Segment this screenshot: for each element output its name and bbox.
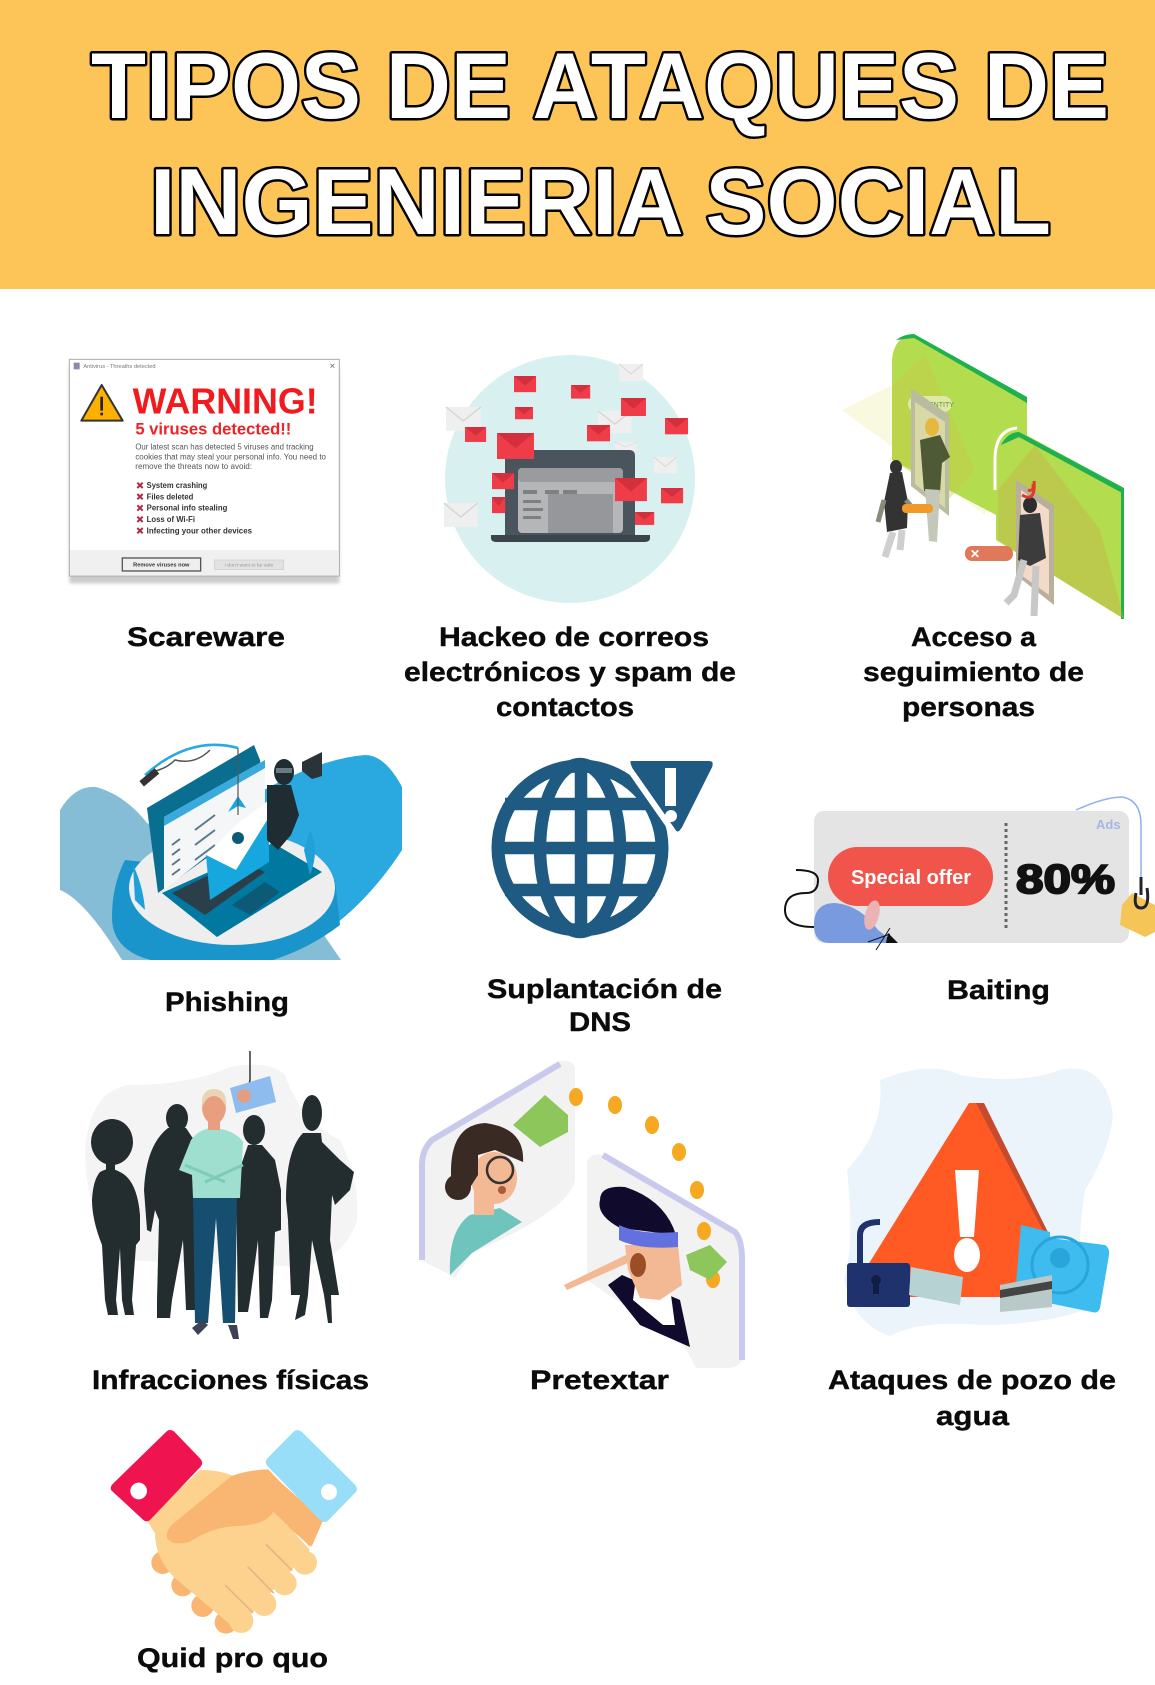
icon: warning window <box>69 359 339 583</box>
label: Ataques de pozo de agua <box>828 1365 1116 1431</box>
panel: pretexting <box>420 1061 744 1395</box>
label: Hackeo de correos: Hackeo de correos <box>439 622 709 652</box>
icon: handshake <box>111 1430 357 1634</box>
label: Acceso a seguimiento de personas: Acceso a <box>911 622 1037 652</box>
label: Scareware: Scareware <box>127 622 285 652</box>
icon: ad coupon with mouse and bait: 80% <box>1016 856 1115 902</box>
icon: warning window: Files deleted <box>147 492 193 501</box>
icon: warning window: WARNING! <box>133 380 318 421</box>
panel: tailgating <box>842 334 1124 722</box>
label: Acceso a seguimiento de personas: personas <box>902 692 1035 722</box>
label: Ataques de pozo de agua: Ataques de pozo de <box>828 1365 1116 1395</box>
icon: laptop with spam envelopes <box>444 355 695 603</box>
icon: warning window: Personal info stealing <box>147 504 227 513</box>
icon: video call with impostor <box>420 1061 744 1368</box>
icon: warning window: Remove viruses now <box>133 563 190 569</box>
title banner <box>0 0 1155 289</box>
icon: security doors with tailgaters: IDENTITY <box>922 402 954 409</box>
label: Hackeo de correos <box>404 622 736 722</box>
panel: DNS spoofing <box>487 758 722 1037</box>
icon: warning triangle with lock and folder <box>844 1068 1113 1336</box>
icon: laptop phishing hook <box>60 745 402 960</box>
icon: warning window: Our latest scan has detected 5 viruses and tracking <box>135 443 314 452</box>
icon: warning window: ✕ <box>329 362 335 371</box>
icon: warning window: Infecting your other devices <box>147 526 253 535</box>
label: Phishing: Phishing <box>165 987 289 1017</box>
icon: warning window: Loss of Wi-Fi <box>147 515 195 524</box>
label: Suplantación de DNS <box>487 974 722 1037</box>
label: Quid pro quo: Quid pro quo <box>137 1643 328 1673</box>
panel: physical breaches <box>85 1051 369 1395</box>
panel: baiting <box>785 797 1155 1005</box>
icon: warning window: 5 viruses detected!! <box>135 420 291 439</box>
panel: scareware <box>69 359 339 652</box>
label: Acceso a seguimiento de personas: seguimiento de <box>863 657 1084 687</box>
label: Hackeo de correos: contactos <box>496 692 634 722</box>
title: TIPOS DE ATAQUES DE <box>91 33 1109 138</box>
label: Baiting: Baiting <box>947 975 1050 1005</box>
label: Ataques de pozo de agua: agua <box>936 1401 1010 1431</box>
label: Infracciones físicas: Infracciones físicas <box>92 1365 369 1395</box>
icon: group of silhouettes and employee <box>85 1051 357 1339</box>
icon: security doors with tailgaters <box>842 334 1124 619</box>
panel: phishing <box>60 745 402 1017</box>
panel: quid pro quo <box>111 1430 357 1673</box>
title <box>91 33 1109 254</box>
icon: warning window: System crashing <box>147 481 207 490</box>
label: Hackeo de correos: electrónicos y spam de <box>404 657 736 687</box>
icon: warning window: Antivirus - Threaths detected <box>83 364 156 370</box>
label: Suplantación de DNS: DNS <box>569 1007 631 1037</box>
label: Acceso a seguimiento de personas <box>863 622 1084 722</box>
icon: ad coupon with mouse and bait: Ads <box>1096 817 1121 832</box>
icon: ad coupon with mouse and bait: Special offer <box>851 867 971 889</box>
panel: email hacking <box>404 355 736 722</box>
icon: warning window: remove the threats now to avoid: <box>135 462 252 471</box>
icon: warning window: I don't want to be safe <box>225 563 274 569</box>
icon: ad coupon with mouse and bait <box>785 797 1155 950</box>
label: Pretextar: Pretextar <box>530 1365 670 1395</box>
icon: globe with alert <box>496 758 716 934</box>
icon: warning window: cookies that may steal your personal info. You need to <box>135 452 327 461</box>
icon: security doors with tailgaters: ✕ <box>970 547 980 561</box>
label: Suplantación de DNS: Suplantación de <box>487 974 722 1004</box>
panel: watering hole <box>828 1068 1116 1431</box>
title: INGENIERIA SOCIAL <box>150 149 1051 254</box>
